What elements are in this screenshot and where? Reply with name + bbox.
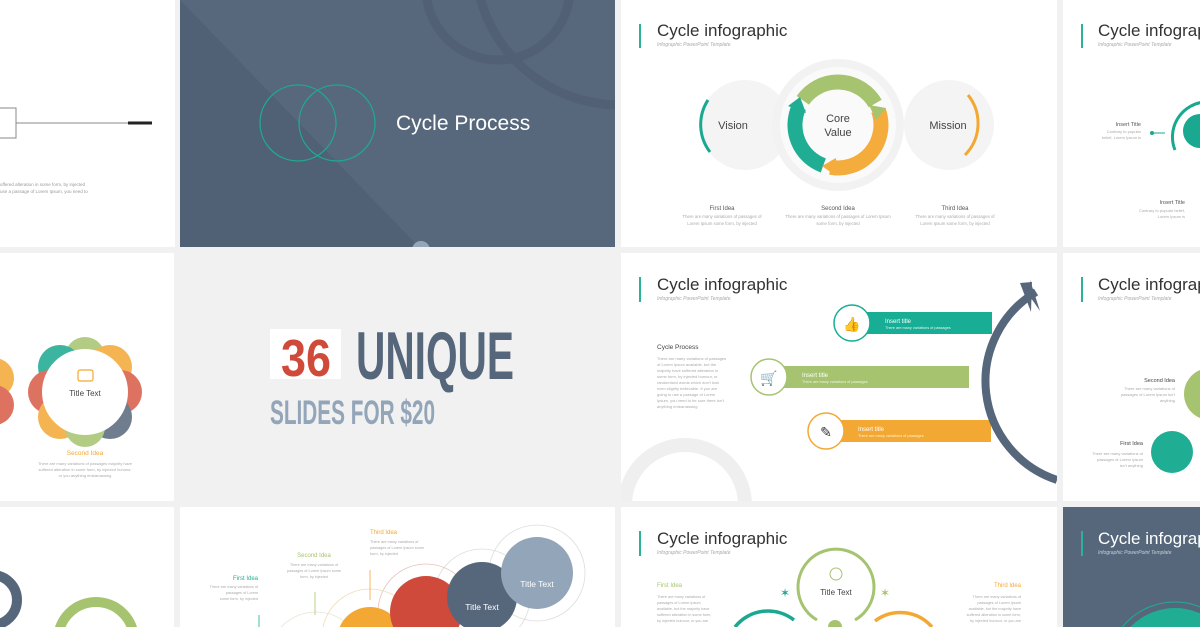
slide: partial right middle: anything	[1160, 398, 1175, 403]
slide: insert title bars with arrow: There are many variations of passages	[802, 380, 868, 384]
slide: insert title bars with arrow	[621, 253, 1057, 501]
slide: three arcs bottom: passages of Lorem Ipsum	[657, 601, 701, 605]
slide: flower title text: or you anything embarrassing	[59, 473, 111, 478]
headline: 36 unique slides: 36	[281, 330, 331, 388]
slide: three arcs bottom: available, but the majority have	[657, 607, 709, 611]
slide: three arcs bottom: Title Text	[820, 588, 853, 597]
slide: dark partial bottom-right: Infographic PowerPoint Template	[1098, 550, 1172, 556]
slide: bubbles title text: passages of Lorem Ipsum some	[287, 569, 341, 573]
slide: insert title bars with arrow: Insert title	[885, 319, 912, 325]
slide: insert title bars with arrow: ✎	[820, 424, 832, 440]
slide: partial right top: Infographic PowerPoint Template	[1098, 42, 1172, 48]
slide: three arcs bottom: Infographic PowerPoint Template	[657, 550, 731, 556]
slide: insert title bars with arrow: Infographic PowerPoint Template	[657, 296, 731, 302]
slide: bubbles title text: There are many variations of	[210, 585, 259, 589]
slide: core value cycle: There are many variations of passages of	[682, 214, 762, 219]
headline: 36 unique slides: SLIDES FOR $20	[270, 394, 435, 432]
slide: insert title bars with arrow: 🛒	[760, 370, 778, 387]
slide: bubbles title text	[180, 507, 615, 627]
slide: three arcs bottom: ✶	[880, 586, 890, 600]
slide: three arcs bottom: There are many variations of	[657, 595, 706, 599]
slide: core value cycle: There are many variations of passages of	[915, 214, 995, 219]
slide: partial right top	[1063, 0, 1200, 247]
slide: flower title text	[0, 253, 174, 501]
slide: core value cycle: There are many variations of passages of Lorem Ipsum	[785, 214, 891, 219]
slide: core value cycle	[621, 0, 1057, 247]
slide: flower title text: There are many variations of passages majority have	[38, 461, 133, 466]
slide: insert title bars with arrow: Insert title	[802, 373, 829, 379]
slide: rings bottom-left	[0, 507, 174, 627]
slide: insert title bars with arrow: Cycle Process	[657, 344, 699, 351]
slide: partial right middle: There are many variations of	[1092, 451, 1144, 456]
slide: three arcs bottom: Third Idea	[994, 583, 1022, 589]
slide: bubbles title text: form, by injected	[300, 575, 328, 579]
slide: bubbles title text: Second Idea	[297, 553, 332, 559]
slide: partial right top: belief, Lorem Ipsum is	[1102, 135, 1141, 140]
slide: bubbles title text: Title Text	[465, 602, 499, 612]
slide: bubbles title text: There are many variations of	[290, 563, 339, 567]
slide: insert title bars with arrow: There are many variations of passages	[858, 434, 924, 438]
slide: insert title bars with arrow: 👍	[843, 316, 861, 333]
slide: three arcs bottom: suffered alteration in some form,	[657, 613, 711, 617]
slide: three arcs bottom: by injected humour, or you are	[657, 619, 708, 623]
slide: core value cycle: some form, by injected	[816, 221, 860, 226]
slide: partial right middle: Infographic PowerPoint Template	[1098, 296, 1172, 302]
slide: insert title bars with arrow: There are many variations of passages	[885, 326, 951, 330]
slide: core value cycle: Cycle infographic	[657, 21, 788, 40]
slide: insert title bars with arrow: even slightly believable. If you are	[657, 386, 718, 391]
slide: insert title bars with arrow: majority have suffered alteration in	[657, 368, 718, 373]
slide: core value cycle: Lorem Ipsum some form, by injected	[687, 221, 757, 226]
slide: three arcs bottom: by injected humour, or you are	[970, 619, 1021, 623]
slide: bubbles title text: Third Idea	[370, 530, 398, 536]
slide: Cycle Process cover	[180, 0, 615, 247]
slide: partial right top: Lorem Ipsum is	[1158, 214, 1185, 219]
slide: partial right middle: First Idea	[1120, 441, 1144, 447]
slide: partial right middle: Second Idea	[1144, 378, 1176, 384]
slide: core value cycle: Lorem Ipsum some form, by injected	[920, 221, 990, 226]
slide: three arcs bottom: Cycle infographic	[657, 529, 788, 548]
slide: three arcs bottom: ✶	[780, 586, 790, 600]
slide: partial diagram top-left: use a passage of Lorem Ipsum, you need to	[0, 189, 88, 194]
headline: 36 unique slides: UNIQUE	[356, 318, 514, 394]
slide: flower title text: Title Text	[69, 389, 102, 398]
slide: three arcs bottom: First Idea	[657, 583, 683, 589]
slide: three arcs bottom	[621, 507, 1057, 627]
slide: three arcs bottom: available, but the majority have	[969, 607, 1021, 611]
slide: insert title bars with arrow: There are many variations of passages	[657, 356, 726, 361]
slide: partial right middle: isn't anything	[1120, 463, 1143, 468]
slide: three arcs bottom: There are many variations of	[973, 595, 1022, 599]
slide: partial right middle: There are many variations of	[1124, 386, 1176, 391]
slide: bubbles title text: some form, by injected	[220, 597, 258, 601]
slide: partial right top: Contrary to popular	[1107, 129, 1142, 134]
slide: insert title bars with arrow: anything embarrassing	[657, 404, 697, 409]
slide: core value cycle: Vision	[718, 120, 748, 132]
slide: core value cycle: First Idea	[709, 206, 735, 212]
slide: partial right top: Insert Title	[1116, 122, 1141, 128]
headline: 36 unique slides	[270, 318, 514, 432]
slide: three arcs bottom: suffered alteration in some form,	[967, 613, 1021, 617]
slide: partial right middle: passages of Lorem Ipsum isn't	[1121, 392, 1176, 397]
slide: partial right top: Insert Title	[1160, 200, 1185, 206]
slide: core value cycle: Second Idea	[821, 206, 856, 212]
slide: insert title bars with arrow: some form, by injected humour, or	[657, 374, 718, 379]
slide: core value cycle: Third Idea	[941, 206, 969, 212]
slide: bubbles title text: passages of Lorem	[226, 591, 258, 595]
slide: dark partial bottom-right	[1063, 507, 1200, 627]
slide: core value cycle: Infographic PowerPoint Template	[657, 42, 731, 48]
slide: insert title bars with arrow: going to use a passage of Lorem	[657, 392, 716, 397]
slide: bubbles title text: passages of Lorem Ipsum some	[370, 546, 424, 550]
slide: partial diagram top-left	[0, 0, 175, 247]
slide: Cycle Process cover: Cycle Process	[396, 112, 530, 135]
slide: flower title text: suffered alteration in some form, by injected humour,	[38, 467, 132, 472]
slide: core value cycle: Value	[824, 127, 852, 139]
slide: core value cycle: Core	[826, 113, 850, 125]
slide: bubbles title text: Title Text	[520, 579, 554, 589]
slide: core value cycle: Mission	[929, 120, 967, 132]
slide: bubbles title text: There are many variations of	[370, 540, 419, 544]
slide: partial diagram top-left: uffered alteration in some form, by injected	[0, 182, 85, 187]
slide: insert title bars with arrow: randomised words which don't look	[657, 380, 719, 385]
slide: insert title bars with arrow: Insert title	[858, 427, 885, 433]
slide: insert title bars with arrow: Cycle infographic	[657, 275, 788, 294]
slide: bubbles title text: First Idea	[233, 576, 259, 582]
slide: three arcs bottom: passages of Lorem Ipsum	[977, 601, 1021, 605]
slide: flower title text: Second Idea	[67, 450, 104, 457]
slide: partial right middle: passages of Lorem Ipsum	[1097, 457, 1144, 462]
slide: insert title bars with arrow: Ipsum, you need to be sure there isn't	[657, 398, 725, 403]
slide: partial right top: Contrary to popular belief,	[1139, 208, 1185, 213]
slide: insert title bars with arrow: of Lorem Ipsum available, but the	[657, 362, 717, 367]
slide: bubbles title text: form, by injected	[370, 552, 398, 556]
slide: partial right middle	[1063, 253, 1200, 501]
